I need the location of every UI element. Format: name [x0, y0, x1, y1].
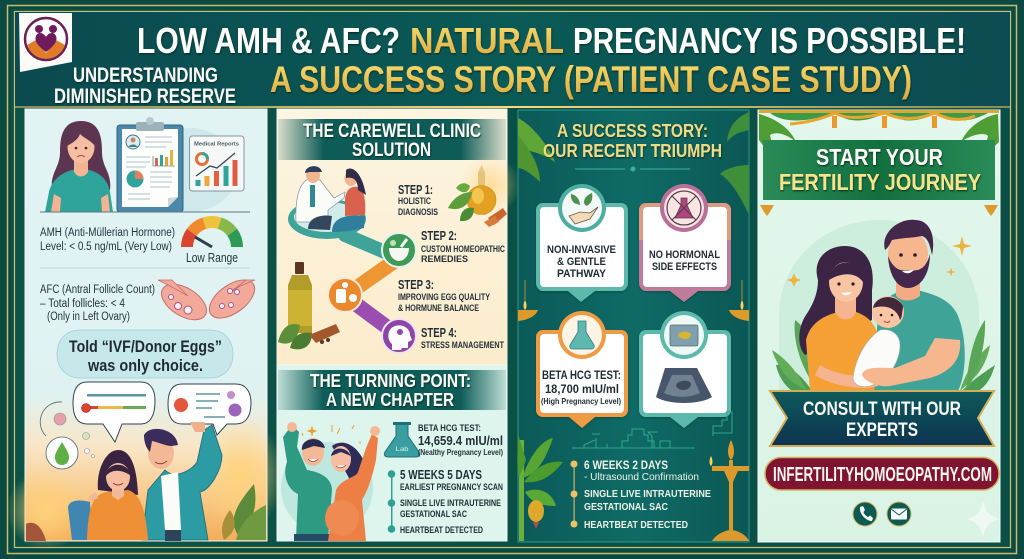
step 3 text: & HORMUNE BALANCE [398, 303, 479, 313]
text: AFC count: (Only in Left Ovary) [47, 311, 130, 323]
icon: lab flask [384, 422, 420, 457]
panel: the carewell clinic solution [277, 109, 520, 365]
timeline: early scan: HEARTBEAT DETECTED [400, 525, 483, 535]
callout: told IVF/donor eggs: Told “IVF/Donor Eggs” [69, 337, 222, 356]
icon: step 4 head [382, 319, 416, 353]
sparkles [787, 236, 972, 287]
baby [853, 296, 904, 387]
heading: carewell clinic solution [278, 119, 506, 161]
heading: understanding diminished reserve: DIMINISHED RESERVE [54, 85, 236, 108]
card: non-invasive: PATHWAY [557, 268, 607, 280]
panel: understanding diminished reserve [6, 109, 284, 550]
icon: step 3 egg cells [328, 278, 362, 312]
card: beta hcg test: BETA HCG TEST: [542, 370, 621, 382]
decorative glow left [6, 470, 86, 550]
text: beta hcg test: 14,659.4 mIU/ml [418, 434, 503, 448]
step 3 text: STEP 3: [398, 278, 434, 292]
step 3 text: IMPROVING EGG QUALITY [398, 292, 490, 302]
icon: medical reports card: Medical Reports [194, 142, 239, 148]
heading: carewell clinic solution: THE CAREWELL CLINIC [303, 121, 481, 142]
timeline: early scan: EARLIEST PREGNANCY SCAN [400, 482, 503, 492]
banner: start your fertility journey: FERTILITY JOURNEY [779, 169, 981, 195]
title: NATURAL [410, 20, 564, 61]
speech bubble: hormone range [73, 382, 155, 442]
icon: lab flask: Lab [396, 447, 409, 453]
decorative sparkle [966, 500, 1000, 537]
panel: a success story [517, 110, 749, 542]
banner: start your fertility journey [763, 140, 995, 200]
heading: understanding diminished reserve: UNDERSTANDING [73, 64, 218, 87]
step 2 text [421, 229, 505, 264]
illustration: doctor [142, 422, 222, 541]
decorative bells [760, 205, 998, 216]
heading: turning point [278, 370, 506, 410]
illustration: oil bottle and herbs [278, 262, 340, 349]
pill: website url [765, 458, 999, 490]
callout: told IVF/donor eggs [57, 330, 233, 378]
illustration: banana tree [517, 434, 563, 541]
report background blob [142, 128, 238, 212]
icon: clipboard with patient report [117, 117, 183, 212]
step 4 text: STEP 4: [421, 326, 457, 340]
icon: mail [887, 502, 911, 526]
decorative temple skyline [572, 412, 732, 448]
text: AFC count: AFC (Antral Follicle Count) [40, 284, 155, 296]
card: non-invasive: NON-INVASIVE [547, 244, 616, 256]
card: beta hcg test: (High Pregnancy Level) [541, 396, 621, 406]
text: AMH level: AMH (Anti-Müllerian Hormone) [40, 227, 175, 239]
illustration: worried woman [45, 121, 113, 212]
text: AFC count [40, 284, 155, 323]
card: beta hcg test: 18,700 mIU/ml [545, 382, 619, 396]
illustration: plant leaves [222, 484, 266, 540]
logo badge [19, 13, 72, 72]
step 2 text: CUSTOM HOMEOPATHIC [421, 244, 505, 254]
card: no hormonal side effects: SIDE EFFECTS [652, 261, 717, 273]
callout: told IVF/donor eggs: was only choice. [87, 356, 203, 375]
gauge: low range: Low Range [186, 251, 238, 265]
speech bubble: egg cells [168, 384, 251, 435]
icon: medical reports card [190, 136, 244, 191]
gauge: low range [186, 222, 238, 265]
timeline: early scan: GESTATIONAL SAC [400, 509, 467, 519]
card: non-invasive: & GENTLE [557, 256, 606, 268]
heading: understanding diminished reserve [54, 64, 236, 108]
timeline: early scan: 5 WEEKS 5 DAYS [400, 468, 482, 482]
header band [15, 12, 1010, 108]
decorative rocks bottom left [26, 523, 46, 541]
text: AMH level [40, 227, 175, 253]
panel: the turning point [277, 365, 507, 541]
ribbon: consult with our experts [770, 391, 994, 446]
step 4 text [421, 326, 504, 350]
text: beta hcg test: (Nealthy Pregnancy Level) [418, 448, 503, 457]
side leaves [772, 320, 995, 391]
text: beta hcg test [418, 423, 503, 457]
panel: start your fertility journey [758, 110, 1000, 542]
title [137, 20, 966, 100]
man's arm [862, 338, 960, 386]
illustration: brass oil lamp [710, 440, 749, 541]
step 2 text: STEP 2: [421, 229, 457, 243]
palm leaves corners [759, 114, 999, 160]
step 3 text [398, 278, 490, 313]
step 1 text [398, 183, 438, 217]
ribbon: consult with our experts: EXPERTS [846, 420, 918, 441]
icon: step 1 oil and herbs [448, 165, 507, 227]
mint arch [779, 220, 979, 391]
card: no hormonal side effects [639, 184, 731, 302]
timeline: ultrasound milestones: GESTATIONAL SAC [584, 501, 668, 513]
step 1 text: STEP 1: [398, 183, 433, 197]
text: AFC count: – Total follicles: < 4 [40, 298, 126, 310]
timeline: early scan: SINGLE LIVE INTRAUTERINE [400, 498, 501, 508]
timeline: ultrasound milestones: HEARTBEAT DETECTED [584, 519, 688, 531]
glow behind oil [460, 155, 520, 215]
ground line [40, 212, 250, 213]
heading: success story: A SUCCESS STORY: [557, 120, 708, 141]
heading: turning point: A NEW CHAPTER [326, 389, 454, 410]
step 1 text: HOLISTIC [398, 196, 431, 206]
step 1 text: DIAGNOSIS [398, 207, 438, 217]
path: connecting band [345, 235, 399, 336]
title: LOW AMH & AFC? [137, 20, 400, 61]
heading: carewell clinic solution: SOLUTION [352, 140, 431, 161]
illustration: celebrating couple [281, 422, 380, 541]
timeline: ultrasound milestones: 6 WEEKS 2 DAYS [584, 458, 668, 472]
icon group: drop and molecules [40, 402, 94, 469]
heading: success story [543, 120, 722, 161]
garland [759, 110, 999, 128]
woman [799, 246, 880, 391]
card: ultrasound [639, 311, 731, 428]
illustration: seated patient [68, 450, 148, 540]
icon: step 2 mortar [382, 233, 416, 267]
banner: start your fertility journey: START YOUR [816, 144, 943, 170]
illustration: ovaries [155, 272, 261, 327]
card: beta hcg test [536, 311, 628, 428]
timeline: ultrasound milestones: SINGLE LIVE INTRAUTERINE [584, 488, 711, 500]
timeline: ultrasound milestones [570, 458, 711, 531]
decorative glow right [196, 417, 284, 533]
step 2 text: REMEDIES [421, 254, 468, 264]
card: non-invasive [536, 184, 628, 302]
card: no hormonal side effects: NO HORMONAL [649, 249, 720, 261]
timeline: early scan [388, 468, 503, 535]
text: AMH level: Level: < 0.5 ng/mL (Very Low) [40, 241, 172, 253]
heading: turning point: THE TURNING POINT: [310, 370, 471, 391]
ribbon: consult with our experts: CONSULT WITH OUR [803, 399, 961, 420]
illustration: doctor and patient on disc [288, 166, 366, 239]
illustration: family with baby [772, 220, 995, 391]
man [874, 220, 965, 391]
timeline: ultrasound milestones: - Ultrasound Confirmation [584, 471, 699, 483]
icon: hanging lamps [518, 280, 749, 321]
icon: phone [853, 502, 877, 526]
palm leaves top [518, 112, 749, 215]
text: beta hcg test: BETA HCG TEST: [418, 423, 481, 434]
heading: success story: OUR RECENT TRIUMPH [543, 140, 722, 161]
step 4 text: STRESS MANAGEMENT [421, 340, 504, 350]
